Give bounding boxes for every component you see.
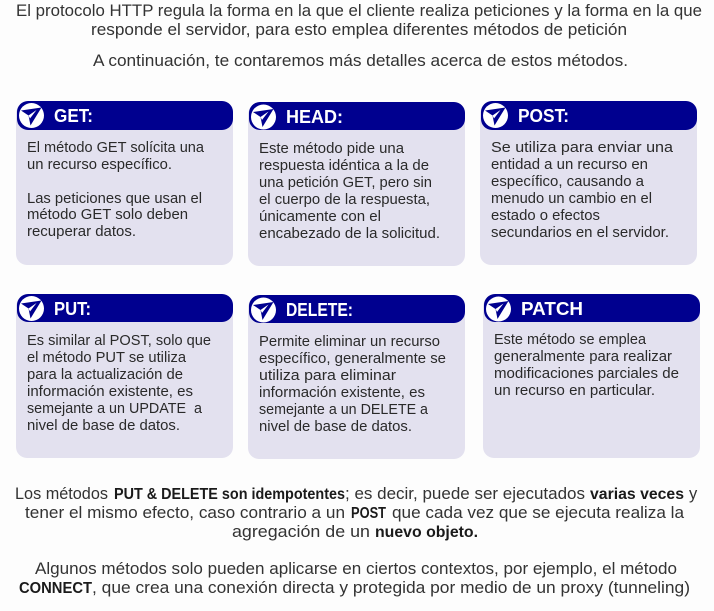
panel: HEAD: el cuerpo de la respuesta,	[259, 192, 430, 208]
panel: PATCH: modificaciones parciales de	[494, 366, 679, 382]
closing text: CONNECT method: , que crea una conexión directa y protegida por medio de un proxy (tunneling)	[92, 579, 690, 597]
closing text: idempotent methods: agregación de un	[232, 523, 370, 541]
panel: DELETE: DELETE:	[286, 300, 353, 320]
panel: GET: un recurso específico.	[27, 157, 172, 173]
panel: DELETE: información existente, es	[259, 385, 425, 401]
panel: GET	[16, 101, 233, 265]
panel: HEAD: encabezado de la solicitud.	[259, 226, 440, 242]
panel: GET: recuperar datos.	[27, 224, 136, 240]
closing text: idempotent methods: POST	[351, 505, 386, 522]
closing text: idempotent methods: y	[689, 485, 698, 503]
panel: GET: GET:	[54, 106, 93, 126]
panel: POST: entidad a un recurso en	[491, 157, 648, 173]
panel: DELETE: Permite eliminar un recurso	[259, 334, 440, 350]
panel: PUT: PUT:	[54, 299, 91, 319]
panel: HEAD: respuesta idéntica a la de	[259, 158, 429, 174]
panel: HEAD: una petición GET, pero sin	[259, 175, 432, 191]
closing text: idempotent methods: que cada vez que se ejecuta realiza la	[392, 504, 685, 522]
closing text: idempotent methods: varias veces	[590, 486, 684, 503]
icon: paper plane PUT	[19, 296, 44, 321]
closing text: idempotent methods: ; es decir, puede ser ejecutados	[345, 485, 585, 503]
panel: DELETE: utiliza para eliminar	[259, 368, 396, 384]
panel: PUT: semejante a un UPDATE a	[27, 401, 203, 417]
panel: POST: estado o efectos	[491, 208, 600, 224]
panel: PUT: para la actualización de	[27, 367, 183, 383]
panel: PATCH: PATCH	[521, 299, 583, 319]
panel: GET: método GET solo deben	[27, 207, 188, 223]
panel: DELETE: nivel de base de datos.	[259, 419, 412, 435]
closing text: idempotent methods: tener el mismo efecto, caso contrario a un	[25, 504, 345, 522]
panel: POST: POST:	[518, 106, 569, 126]
panel: POST: Se utiliza para enviar una	[491, 140, 674, 156]
panel: HEAD: únicamente con el	[259, 209, 381, 225]
panel: PUT: el método PUT se utiliza	[27, 350, 187, 366]
panel: PUT: nivel de base de datos.	[27, 418, 180, 434]
panel: POST: menudo un cambio en el	[491, 191, 652, 207]
panel: PUT: información existente, es	[27, 384, 193, 400]
panel: HEAD: Este método pide una	[259, 141, 405, 157]
panel: GET: El método GET solícita una	[27, 140, 205, 156]
closing text: CONNECT method: Algunos métodos solo pueden aplicarse en ciertos contextos, por ejemplo, el método	[35, 560, 677, 578]
icon: paper plane DELETE	[251, 298, 276, 322]
panel: PUT: Es similar al POST, solo que	[27, 333, 211, 349]
icon: paper plane GET	[19, 103, 44, 128]
closing text: idempotent methods: Los métodos	[15, 485, 108, 503]
panel: POST: secundarios en el servidor.	[491, 225, 669, 241]
icon: paper plane HEAD	[251, 104, 276, 130]
icon: paper plane PATCH	[486, 296, 511, 322]
panel: DELETE	[248, 295, 465, 459]
panel: DELETE: semejante a un DELETE a	[259, 402, 429, 418]
intro text: responde el servidor, para esto emplea diferentes métodos de petición	[91, 21, 627, 39]
panel: PATCH: un recurso en particular.	[494, 383, 655, 399]
closing text: idempotent methods	[15, 485, 698, 541]
panel: DELETE: específico, generalmente se	[259, 351, 446, 367]
panel: POST	[480, 101, 697, 265]
intro text: El protocolo HTTP regula la forma en la que el cliente realiza peticiones y la forma en la que	[16, 2, 702, 20]
closing text: CONNECT method	[19, 560, 690, 597]
panel: GET: Las peticiones que usan el	[27, 191, 202, 207]
panel: PATCH: Este método se emplea	[494, 332, 647, 348]
intro text	[16, 2, 702, 70]
panel: HEAD	[248, 102, 465, 266]
panel: HEAD: HEAD:	[286, 107, 343, 127]
closing text: idempotent methods: PUT & DELETE son idempotentes	[114, 486, 345, 503]
icon: paper plane POST	[483, 103, 508, 128]
closing text: idempotent methods: nuevo objeto.	[375, 524, 478, 541]
closing text: CONNECT method: CONNECT	[19, 580, 93, 597]
panel: PATCH	[483, 294, 700, 458]
intro text: A continuación, te contaremos más detalles acerca de estos métodos.	[93, 52, 628, 70]
panel: PATCH: generalmente para realizar	[494, 349, 672, 365]
panel: POST: específico, causando a	[491, 174, 645, 190]
panel: PUT	[16, 294, 233, 458]
